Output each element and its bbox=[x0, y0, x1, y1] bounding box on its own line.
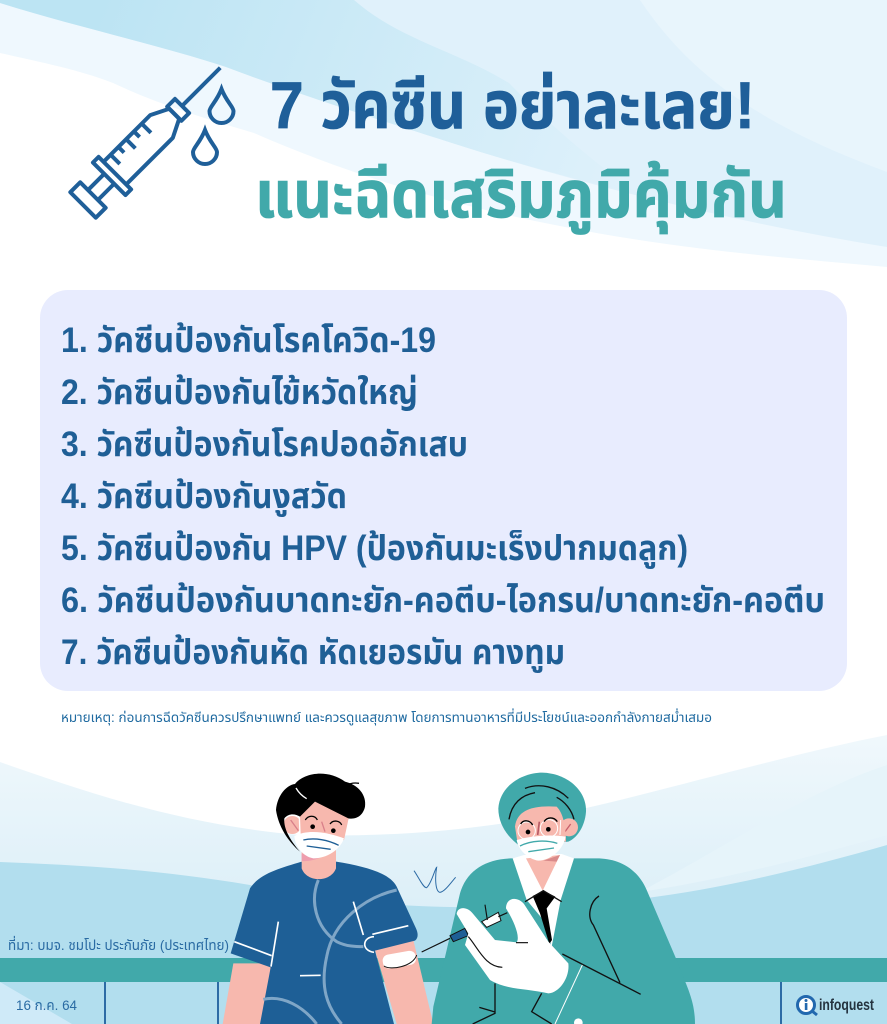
ear bbox=[283, 816, 301, 834]
illustration: patient bbox=[223, 774, 456, 1024]
coat button bbox=[574, 1018, 583, 1024]
mask folds bbox=[520, 841, 557, 852]
icon: drop lower bbox=[193, 130, 217, 164]
shirt seams bbox=[234, 902, 408, 976]
hair strand bbox=[347, 783, 359, 785]
arm right bbox=[375, 940, 433, 1024]
panel: vaccine list bbox=[40, 290, 847, 691]
hair bbox=[276, 774, 365, 852]
nose bbox=[538, 822, 539, 835]
body bbox=[432, 858, 695, 1024]
teal rail bbox=[0, 958, 887, 982]
icon: drop upper bbox=[210, 89, 234, 123]
cap bbox=[498, 773, 586, 846]
mask strap bbox=[297, 817, 302, 834]
rail posts bbox=[105, 982, 781, 1024]
neck bbox=[526, 855, 560, 891]
cap folds bbox=[509, 786, 574, 819]
shirt scratches bbox=[263, 880, 397, 1024]
source: ที่มา: บมจ. ชมโปะ ประกันภัย (ประเทศไทย) bbox=[8, 935, 229, 953]
coat lines bbox=[473, 896, 641, 1024]
background: top waves bbox=[0, 0, 887, 270]
date: 16 ก.ค. 64 bbox=[16, 997, 77, 1013]
glasses bbox=[518, 820, 561, 839]
face bbox=[515, 806, 566, 842]
glove bbox=[457, 899, 569, 993]
arm left bbox=[223, 963, 273, 1024]
hair highlight bbox=[296, 788, 307, 799]
list item 5: 5. วัคซีนป้องกัน HPV (ป้องกันมะเร็งปากมดลูก) bbox=[61, 529, 688, 569]
list item 1: 1. วัคซีนป้องกันโรคโควิด-19 bbox=[61, 321, 436, 360]
brows bbox=[521, 818, 557, 825]
eyes bbox=[310, 824, 336, 833]
illustration: doctor bbox=[422, 773, 695, 1024]
face bbox=[299, 802, 349, 850]
background: bottom waves bbox=[0, 735, 887, 1024]
list item 7: 7. วัคซีนป้องกันหัด หัดเยอรมัน คางทูม bbox=[61, 633, 565, 673]
title line 1: 7 วัคซีน อย่าละเลย! bbox=[270, 68, 755, 142]
list item 2: 2. วัคซีนป้องกันไข้หวัดใหญ่ bbox=[61, 373, 418, 412]
neck shadow bbox=[543, 855, 560, 862]
mask bbox=[517, 835, 566, 861]
tie bbox=[533, 891, 555, 944]
ear bbox=[560, 818, 578, 836]
bandage edge bbox=[384, 955, 417, 968]
syringe bbox=[422, 905, 507, 952]
glove lines bbox=[468, 937, 528, 967]
list item 4: 4. วัคซีนป้องกันงูสวัด bbox=[61, 477, 347, 517]
cheek marks bbox=[291, 820, 325, 832]
coat seam bbox=[555, 965, 582, 1024]
icon: syringe bbox=[67, 52, 236, 221]
title line 2: แนะฉีดเสริมภูมิคุ้มกัน bbox=[255, 157, 787, 234]
brows bbox=[305, 816, 342, 825]
wiggle lines bbox=[414, 867, 456, 892]
mask bbox=[294, 832, 344, 858]
shirt bbox=[231, 862, 418, 1024]
neck bbox=[302, 847, 336, 879]
mask folds bbox=[303, 839, 339, 849]
footnote: หมายเหตุ: ก่อนการฉีดวัคซีนควรปรึกษาแพทย์ และควรดูแลสุขภาพ โดยการทานอาหารที่มีประโยชน์และออกกำลังกายสม่ำเสมอ bbox=[61, 708, 712, 726]
list item 3: 3. วัคซีนป้องกันโรคปอดอักเสบ bbox=[61, 425, 468, 464]
list item 6: 6. วัคซีนป้องกันบาดทะยัก-คอตีบ-ไอกรน/บาดทะยัก-คอตีบ bbox=[61, 581, 825, 620]
collar bbox=[513, 854, 574, 947]
collar edge bbox=[525, 891, 562, 902]
eyes bbox=[526, 827, 551, 834]
neck shadow bbox=[302, 853, 322, 861]
bandage bbox=[382, 950, 417, 969]
ear mark bbox=[563, 824, 571, 834]
logo: infoquest bbox=[798, 996, 875, 1015]
